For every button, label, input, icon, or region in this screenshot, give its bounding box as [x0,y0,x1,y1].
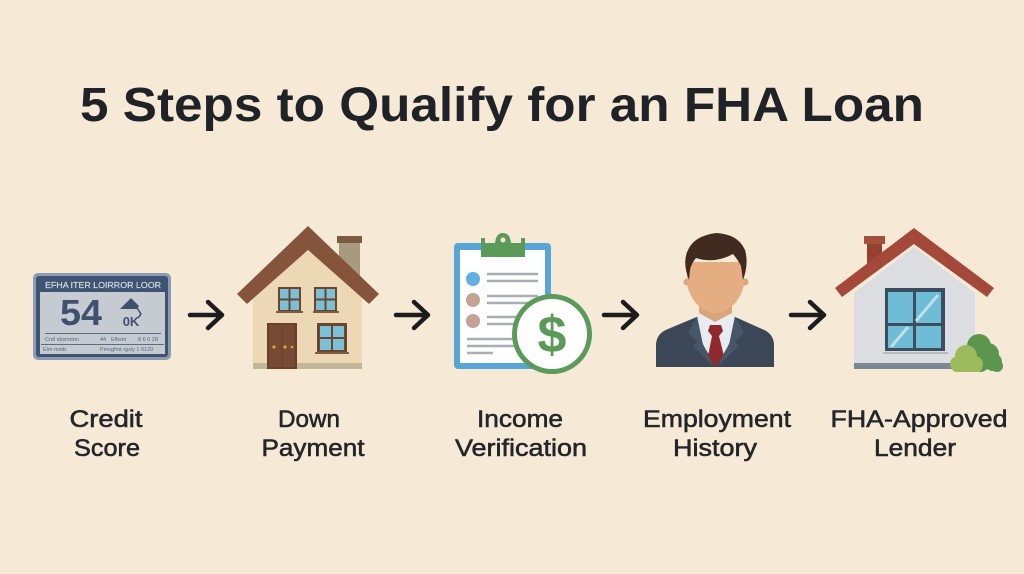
label: credit score [70,406,143,462]
icon: businessman [656,233,774,367]
label: credit score: Credit [70,406,143,433]
title: 5 Steps to Qualify for an FHA Loan [80,79,924,132]
icon: clipboard with dollar [454,233,590,372]
clipboard clip [481,233,525,257]
window [883,288,948,354]
checklist rows [466,272,538,353]
icon: credit score card: EFHA ITER LOIRROR LOOR [45,280,161,290]
bushes [950,334,1003,372]
upper left window [276,287,303,313]
label: employment history: Employment [643,406,791,433]
label: down payment: Payment [262,435,365,462]
label: employment history [643,406,791,462]
label: employment history: History [673,435,757,462]
label: credit score: Score [74,435,140,462]
label: FHA-approved lender: Lender [874,435,956,462]
label: FHA-approved lender [830,406,1008,462]
neck and face [699,298,732,322]
roof [237,226,379,304]
icon: credit score card: 8 6 0 28 [138,337,158,343]
house body [854,247,975,363]
label: income verification [455,406,587,462]
icon: credit score card: Crdl sbsmmm [45,337,79,343]
label: income verification: Income [477,406,563,433]
shirt [697,311,735,366]
label: down payment [262,406,365,462]
icon: credit score card: 54 [60,292,102,333]
label: FHA-approved lender: FHA-Approved [830,406,1008,433]
chimney [337,236,362,280]
dollar badge: $ [538,306,567,364]
chimney [864,236,885,268]
icon: credit score card: 0K [123,314,140,329]
tie [708,325,724,367]
door [267,323,297,369]
arrow 1 [190,302,222,328]
label: income verification: Verification [455,435,587,462]
suit [656,316,774,367]
icon: FHA-approved lender house [835,228,1003,372]
arrow 2 [396,302,428,328]
icon: credit score card: Elbsm [111,337,127,343]
icon: credit score card: Pmsgfmt rgsly 1 0120 [100,347,153,353]
arrow 3 [604,302,637,328]
icon: credit score card: 44 [100,337,106,343]
roof [835,228,994,297]
icon: credit score card: Elm mmb [43,347,66,353]
upper right window [313,287,339,313]
arrow 4 [791,302,824,328]
house body [253,251,362,366]
label: down payment: Down [278,406,340,433]
icon: house with down payment [237,226,379,369]
lower right window [315,323,349,354]
lapels [688,317,744,367]
hair [685,233,747,280]
icon: credit score card [33,273,171,360]
